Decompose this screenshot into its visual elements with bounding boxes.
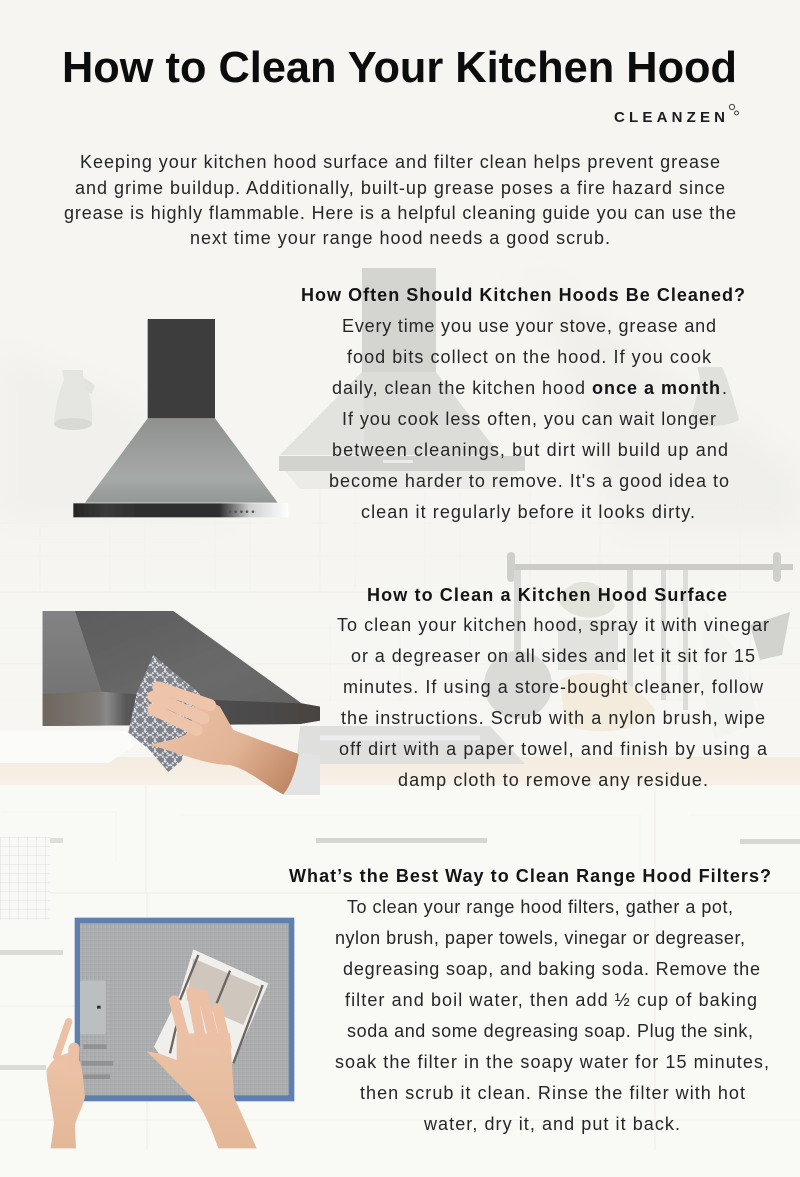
text: filters body: water, dry it, and put it back. <box>423 1114 680 1134</box>
text: how often body: once a month <box>592 378 720 398</box>
heading: how often: How Often Should Kitchen Hoods Be Cleaned? <box>301 285 745 305</box>
text: surface body: minutes. If using a store-bought cleaner, follow <box>343 677 764 697</box>
text: surface body: off dirt with a paper towel, and finish by using a <box>339 739 768 759</box>
illustration: hand wiping hood <box>43 611 320 795</box>
background: right lamp <box>690 367 739 426</box>
text: filters body: filter and boil water, then add ½ cup of baking <box>345 990 757 1010</box>
illustration: hands cleaning mesh filter <box>47 918 294 1148</box>
right hand <box>147 992 257 1148</box>
illustration: chimney range hood <box>73 319 288 517</box>
panel: how often <box>73 285 745 522</box>
text: how often body: become harder to remove. It's a good idea to <box>329 471 729 491</box>
text: filters body: degreasing soap, and baking soda. Remove the <box>343 959 760 979</box>
text: how often body <box>329 316 729 522</box>
text: filters body: To clean your range hood filters, gather a pot, <box>347 897 733 917</box>
background: hanging tea towel <box>0 837 50 920</box>
background: stove <box>296 726 525 764</box>
text: how often body: If you cook less often, you can wait longer <box>342 409 716 429</box>
heading: surface: How to Clean a Kitchen Hood Surface <box>367 585 727 605</box>
text: how often body: clean it regularly before it looks dirty. <box>361 502 695 522</box>
intro paragraph: next time your range hood needs a good scrub. <box>190 228 610 248</box>
text: filters body: then scrub it clean. Rinse the filter with hot <box>360 1083 745 1103</box>
background: faded centre hood <box>279 268 525 489</box>
text: filters body: soak the filter in the soapy water for 15 minutes, <box>335 1052 769 1072</box>
text: how often body: food bits collect on the hood. If you cook <box>347 347 712 367</box>
logo: Cleanzen: CLEANZEN <box>614 109 725 126</box>
left hand <box>47 1022 85 1148</box>
text: how often body: . <box>722 378 727 398</box>
title: How to Clean Your Kitchen Hood <box>62 43 737 92</box>
background: counter <box>0 757 800 785</box>
text: how often body: Every time you use your stove, grease and <box>342 316 716 336</box>
hand <box>150 687 299 794</box>
background: white sink <box>0 731 136 763</box>
intro paragraph: grease is highly flammable. Here is a helpful cleaning guide you can use the <box>64 203 736 223</box>
heading: filters: What’s the Best Way to Clean Range Hood Filters? <box>289 866 771 886</box>
text: surface body: the instructions. Scrub with a nylon brush, wipe <box>341 708 765 728</box>
background tiles <box>0 490 800 700</box>
panel: filters <box>47 866 771 1148</box>
text: surface body <box>337 615 769 790</box>
background: cabinets <box>0 785 800 1177</box>
text: surface body: To clean your kitchen hood, spray it with vinegar <box>337 615 769 635</box>
intro paragraph: Keeping your kitchen hood surface and filter clean helps prevent grease <box>80 152 720 172</box>
intro paragraph: and grime buildup. Additionally, built-up grease poses a fire hazard since <box>75 178 725 198</box>
text: filters body: soda and some degreasing soap. Plug the sink, <box>347 1021 753 1041</box>
text: how often body: daily, clean the kitchen hood <box>332 378 585 398</box>
text: how often body: between cleanings, but dirt will build up and <box>332 440 728 460</box>
background: left lamp <box>54 370 95 430</box>
text: filters body <box>335 897 769 1134</box>
panel: surface <box>43 585 769 795</box>
text: surface body: or a degreaser on all sides and let it sit for 15 <box>351 646 755 666</box>
intro paragraph <box>64 152 736 248</box>
background: utensil rail and hanging items <box>484 552 793 740</box>
text: surface body: damp cloth to remove any residue. <box>398 770 708 790</box>
text: filters body: nylon brush, paper towels, vinegar or degreaser, <box>335 928 745 948</box>
